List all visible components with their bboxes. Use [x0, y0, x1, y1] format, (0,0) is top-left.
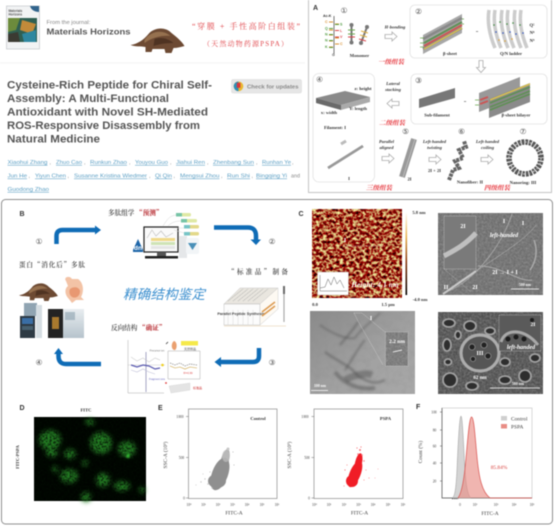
nanoring: Nanoring: III — [510, 180, 537, 185]
control scatter plot: 10² — [216, 503, 220, 507]
blue arrow 4 — [54, 348, 101, 364]
panel letter F: F — [416, 404, 421, 411]
H-bonding arrow — [384, 24, 406, 41]
level four label: 四级组装 — [484, 183, 512, 192]
monomer strands — [348, 23, 369, 45]
control scatter plot: 500 — [179, 456, 184, 460]
validation chart: Fragment ions — [149, 378, 166, 381]
author list: Qi Qin — [155, 174, 172, 180]
histogram frame and axes: 20 — [433, 480, 436, 484]
author list: , — [129, 160, 131, 166]
journal cover — [6, 6, 40, 49]
author list: Runhan Ye — [262, 160, 291, 166]
center heading: 精确结构鉴定 — [123, 283, 206, 303]
computer and data icon — [133, 213, 199, 258]
histogram legend — [501, 416, 528, 430]
author list: Zhenbang Sun — [213, 160, 254, 166]
article title: Assembly: A Multi-Functional — [7, 93, 169, 105]
panel E: flow cytometry — [158, 405, 406, 516]
level 2I rod — [402, 127, 415, 182]
panel letter A: A — [313, 5, 318, 12]
author list: Run Shi — [227, 174, 250, 180]
PSPA scatter plot: 10² — [342, 503, 346, 507]
blue arrow 3 — [214, 348, 259, 367]
nanofiber — [449, 127, 483, 184]
journal header — [6, 6, 300, 53]
box: sub-filament and bilayer — [411, 74, 547, 124]
control scatter plot: 10³ — [230, 503, 236, 507]
green cell image — [34, 417, 146, 502]
down arrow — [476, 60, 486, 72]
step 1 marker: ① — [36, 237, 43, 246]
author list: , — [84, 160, 86, 166]
histogram legend: Control — [511, 416, 528, 422]
validation chart: R²=0.99 — [184, 372, 193, 375]
peptide sequence: L — [340, 29, 343, 33]
box: beta sheet and ladder — [410, 5, 547, 58]
author list: , — [149, 174, 151, 180]
parallel aligned arrow: Parallel — [379, 139, 395, 144]
SEM image: left-handed fibres: 2I — [460, 224, 466, 230]
SEM image: left-handed fibres: 500 nm — [519, 283, 532, 287]
histogram frame and axes: 10⁴ — [512, 503, 517, 507]
TEM image: 100 nm — [314, 384, 327, 388]
SEM image: left-handed fibres: I — [503, 219, 506, 225]
control scatter plot: FITC-A — [225, 510, 243, 516]
histogram frame and axes: 10² — [473, 503, 477, 507]
level three label: 三级组装 — [366, 183, 394, 192]
panel D: fluorescence micrograph — [15, 405, 146, 502]
control scatter plot: 10¹ — [201, 503, 206, 507]
box: sub-filament and bilayer: β-sheet bilayer — [502, 112, 530, 118]
validation chart: 天然样品 — [184, 346, 196, 351]
author list: , — [256, 160, 258, 166]
nanoring — [509, 127, 541, 185]
author list: , — [50, 160, 52, 166]
SEM image: nanorings: 62 nm — [473, 376, 487, 381]
histogram frame and axes: 0 — [459, 503, 461, 507]
box: beta sheet and ladder: ② — [415, 7, 422, 16]
step 3 marker: ③ — [269, 358, 276, 367]
histogram frame and axes: FITC-A — [481, 511, 499, 517]
level one label: 一级组装 — [378, 57, 406, 66]
PSPA scatter plot: 10⁵ — [386, 503, 391, 507]
AFM colour scale: 0.0 — [312, 302, 319, 307]
box: beta sheet and ladder: Q⁵ — [530, 22, 535, 28]
AFM image: Height: 4.1 nm — [350, 281, 399, 289]
box: filament: x: width — [321, 110, 338, 115]
box: filament: z: height — [355, 86, 372, 91]
control scatter plot: 1000 — [176, 415, 184, 419]
control scatter plot: Control — [250, 416, 266, 421]
check for updates button — [232, 80, 302, 93]
left-handed coiling arrow — [475, 139, 500, 164]
box: filament: I — [348, 176, 350, 181]
journal cover: Materials — [8, 9, 23, 13]
percentage label: 85.84% — [491, 465, 508, 471]
peptide sequence: C — [340, 42, 343, 46]
peptide sequence: C — [325, 20, 328, 24]
histogram legend: PSPA — [511, 424, 523, 430]
PSPA scatter plot: 10⁴ — [371, 503, 376, 507]
step heading: standard preparation: “标准品”制备 — [228, 266, 288, 276]
author list: and — [291, 174, 300, 180]
panel B: structure identification workflow — [19, 207, 288, 393]
control scatter plot — [162, 409, 280, 516]
author list: Runkun Zhao — [90, 160, 127, 166]
pangolin and human with mass spectrometer — [19, 277, 84, 338]
author list: , — [174, 174, 176, 180]
PSPA scatter plot: SSC-A (10³) — [286, 441, 293, 468]
peptide sequence: G — [332, 53, 335, 57]
histogram frame and axes: 10³ — [494, 503, 499, 507]
peptide sequence: N — [325, 32, 328, 36]
level 2I rod: ⑤ — [402, 127, 409, 136]
author list: Jun He — [8, 174, 27, 180]
histogram frame and axes: 60 — [433, 444, 436, 448]
peptide sequence: Ac-K — [323, 14, 332, 18]
AFM image — [312, 209, 402, 298]
box: filament: Filament: I — [324, 125, 346, 130]
box: beta sheet and ladder: N⁹ — [530, 38, 535, 43]
SEM image: nanorings: left-handed — [507, 345, 536, 351]
control scatter plot: 10⁴ — [245, 503, 250, 507]
AFM colour scale: 1.5 μm — [381, 302, 395, 307]
step 2 marker: ② — [269, 237, 276, 246]
peptide sequence: S — [340, 22, 343, 26]
author list: Zhuo Cao — [56, 160, 82, 166]
FITC-PSPA side label: FITC-PSPA — [15, 444, 20, 469]
control peak — [452, 416, 471, 498]
TEM image — [310, 311, 415, 394]
control scatter plot: 0 — [183, 496, 185, 500]
left-handed twisting arrow: twisting — [427, 145, 443, 150]
author list: , — [221, 174, 223, 180]
left-handed twisting arrow — [422, 139, 447, 173]
control scatter plot: 10⁶ — [275, 503, 280, 507]
panel letter C: C — [298, 211, 304, 218]
control scatter plot: SSC-A (10³) — [162, 441, 169, 468]
peptide sequence: V — [340, 35, 343, 39]
FITC heading: FITC — [81, 408, 91, 412]
histogram frame and axes: 80 — [433, 428, 436, 432]
SEM image: left-handed fibres: I — [522, 221, 525, 227]
box: beta sheet and ladder: N⁸ — [530, 30, 535, 35]
panel letter B: B — [20, 211, 25, 218]
box: filament — [313, 74, 374, 182]
SEM image: nanorings: 500 nm — [512, 382, 525, 386]
panel letter E: E — [158, 405, 163, 412]
validation chart: Precursor ion — [150, 350, 165, 352]
AFM image: I — [344, 237, 347, 244]
left-handed coiling arrow: Left-handed — [475, 139, 500, 144]
author list: Susanne Kristina Wiedmer — [74, 174, 147, 180]
PSPA peak — [458, 417, 532, 498]
PSPA scatter plot: 500 — [304, 456, 310, 460]
box: filament: ④ — [316, 75, 323, 84]
SEM image: nanorings: III — [476, 351, 484, 357]
step heading: digested peptides: 蛋白“消化后”多肽 — [19, 259, 85, 269]
PSPA scatter plot: 10³ — [356, 503, 362, 507]
PSPA scatter plot: FITC-A — [351, 510, 368, 516]
peptide sequence: Q — [325, 26, 328, 30]
author list: Youyou Guo — [135, 160, 168, 166]
article title: Natural Medicine — [7, 134, 100, 146]
box: filament: Y: length — [349, 106, 367, 111]
peptide sequence: K — [325, 45, 328, 49]
level 2I rod: 2I — [407, 176, 412, 182]
author list: Guodong Zhao — [8, 187, 49, 193]
author list: , — [207, 160, 209, 166]
peptide sequence: N — [325, 38, 328, 42]
pangolin illustration — [130, 29, 184, 53]
article title: ROS-Responsive Disassembly from — [7, 120, 200, 132]
nanofiber: ⑥ — [458, 127, 465, 136]
left-handed twisting arrow: Left-handed — [422, 139, 447, 144]
step heading: reverse structural confirmation: 反向结构 “确证” — [111, 322, 165, 332]
red caption line 1: “穿膜 + 手性高阶白组装” — [192, 21, 300, 31]
left-handed coiling arrow: coiling — [481, 145, 495, 150]
box: beta sheet and ladder: = — [476, 29, 479, 34]
author list: Mengsui Zhou — [180, 174, 220, 180]
SEM image: left-handed fibres: II — [444, 285, 449, 291]
PSPA scatter plot — [286, 409, 406, 516]
parallel aligned arrow — [379, 139, 395, 163]
lateral stacking arrow: Lateral — [385, 81, 401, 86]
SEM image: nanorings — [438, 312, 543, 394]
TEM image: 2.2 nm — [389, 339, 405, 345]
panel C: microscopy images — [298, 209, 543, 394]
PSPA scatter plot: 10¹ — [327, 503, 331, 507]
author list — [8, 160, 300, 193]
PSPA scatter plot: PSPA — [380, 416, 392, 421]
author list: , — [170, 160, 172, 166]
author list: , — [292, 160, 294, 166]
article title: Antioxidant with Novel SH-Mediated — [7, 106, 208, 118]
parallel aligned arrow: aligned — [379, 145, 394, 150]
PSPA scatter plot: 10⁶ — [401, 503, 406, 507]
AFM colour scale: 5.8 nm — [412, 210, 426, 215]
nanoring: ⑦ — [520, 127, 527, 136]
PSPA scatter plot: 10⁰ — [312, 503, 318, 507]
check for updates button: Check for updates — [247, 84, 298, 90]
histogram frame and axes: 40 — [433, 462, 436, 466]
peptide plate icon — [217, 286, 286, 326]
step heading: peptidomics prediction: 多肽组学 “预测” — [108, 207, 162, 217]
AFM colour scale: -4.0 nm — [413, 297, 428, 302]
peptide sequence — [323, 14, 343, 57]
validation chart: 标准品 — [193, 385, 202, 390]
level two label: 二级组装 — [379, 118, 406, 127]
TEM image: I — [370, 316, 373, 322]
box: beta sheet and ladder: β-sheet — [443, 51, 457, 56]
histogram frame and axes — [417, 408, 535, 517]
author list: , — [28, 174, 30, 180]
PSPA scatter plot: 0 — [308, 496, 310, 500]
panel F: histogram — [416, 404, 535, 517]
box: beta sheet and ladder: Q/N ladder — [500, 51, 522, 56]
histogram frame and axes: 10⁵ — [530, 503, 535, 507]
box: sub-filament and bilayer: = — [464, 99, 467, 104]
computer and data icon: dn — [134, 245, 142, 252]
author list: , — [252, 174, 254, 180]
blue arrow 1 — [56, 226, 101, 244]
control scatter plot: 10⁵ — [260, 503, 265, 507]
PSPA scatter plot: 1000 — [301, 415, 309, 419]
journal label: From the journal: — [46, 20, 91, 26]
author list: Xiaohui Zhang — [8, 160, 48, 166]
SEM image: left-handed fibres: left-handed — [490, 233, 519, 239]
main figure frame — [2, 200, 552, 524]
AFM colour scale — [312, 210, 428, 307]
step 1 marker: ① — [341, 6, 348, 15]
box: sub-filament and bilayer: Sub-filament — [424, 112, 450, 118]
SEM image: nanorings: 2I — [531, 322, 535, 328]
journal cover: Horizons — [8, 12, 22, 16]
peptide plate icon: Parallel Peptide Synthesis — [217, 312, 265, 316]
SEM image: left-handed fibres — [438, 213, 543, 295]
author list: , — [68, 174, 70, 180]
histogram frame and axes: 100 — [431, 410, 437, 414]
author list: Bingqing Yi — [256, 174, 287, 180]
author list: Jiahui Ren — [176, 160, 205, 166]
histogram frame and axes: Count (%) — [417, 440, 424, 463]
step 4 marker: ④ — [36, 358, 43, 367]
article title: Cysteine-Rich Peptide for Chiral Self- — [7, 80, 212, 92]
lateral stacking arrow — [384, 81, 402, 108]
monomer label: Monomer — [350, 53, 369, 58]
validation chart — [128, 340, 202, 393]
author list: Yiyun Chen — [35, 174, 66, 180]
panel A: self-assembly hierarchy — [308, 0, 552, 192]
control scatter plot: 10⁰ — [186, 503, 192, 507]
SEM image: left-handed fibres: 2I → I + I — [492, 270, 518, 276]
panel letter D: D — [20, 405, 25, 412]
SEM image: left-handed fibres: 2I — [472, 285, 478, 291]
H-bonding arrow: H-bonding — [384, 24, 406, 30]
box: sub-filament and bilayer: ③ — [415, 76, 422, 85]
lateral stacking arrow: stacking — [384, 87, 402, 92]
blue arrow 2 — [214, 228, 261, 245]
nanofiber: Nanofiber: II — [457, 180, 483, 184]
left-handed twisting arrow: 2I + 2I — [428, 168, 441, 173]
article title — [7, 80, 212, 146]
journal name: Materials Horizons — [46, 26, 131, 36]
red caption line 2: （天然动物药源PSPA） — [203, 39, 288, 48]
